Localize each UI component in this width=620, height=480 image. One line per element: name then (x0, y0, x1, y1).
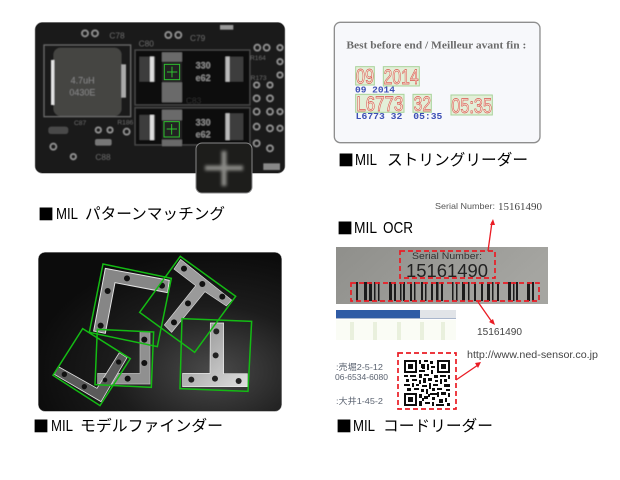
green model match boxes (53, 256, 252, 406)
caption: OCR: ■ (337, 215, 353, 239)
caption: pattern matching: ■ (38, 201, 54, 225)
dashed box: barcode (351, 283, 539, 301)
detected characters: L6773 (356, 92, 403, 116)
QR decoded URL: http://www.ned-sensor.co.jp (467, 350, 598, 361)
icon: upper capacitor (135, 50, 250, 105)
recognised strings: L6773 32 (356, 112, 402, 122)
inset: cross pattern template (196, 143, 252, 193)
icon: upper capacitor: e62 (196, 73, 211, 83)
label serial text: Serial Number: (412, 251, 482, 261)
caption: pattern matching (38, 201, 225, 225)
board silkscreen labels: R173 (251, 75, 267, 82)
QR code (404, 360, 450, 406)
caption: code reader: MIL (353, 418, 375, 435)
caption: string reader: MIL (355, 152, 377, 169)
OCR result label: 15161490 (498, 202, 542, 213)
caption: code reader (336, 413, 493, 437)
card heading text: Best before end / Meilleur avant fin : (346, 40, 526, 52)
recognised strings: 05:35 (413, 112, 442, 122)
dashed box: QR (398, 353, 456, 409)
dashed box: serial (400, 251, 495, 278)
caption: string reader: ストリングリーダー (387, 151, 528, 169)
arrow: QR to url (456, 362, 481, 380)
T bracket lower right (183, 323, 247, 387)
OCR result label (435, 201, 542, 213)
icon: upper capacitor: 330 (196, 60, 211, 70)
panel: MIL pattern matching PCB image (35, 22, 285, 173)
detected characters: 2014 (384, 65, 419, 89)
caption: model finder: モデルファインダー (80, 416, 223, 435)
L bracket upper left (94, 268, 169, 333)
document fragment: blue bar and table (336, 310, 456, 340)
icon: inductor component (44, 45, 131, 117)
barcode decoded number: 15161490 (477, 327, 522, 338)
detected characters: 09 (356, 65, 374, 89)
panel: MIL model finder image (38, 252, 282, 411)
L bracket centre (98, 332, 150, 384)
caption: code reader: コードリーダー (383, 417, 493, 435)
address text fragment: :売堀2-5-12 (336, 362, 383, 372)
caption: code reader: ■ (336, 413, 352, 437)
caption: OCR: OCR (383, 220, 413, 237)
icon: lower capacitor: 330 (196, 118, 211, 128)
panel: OCR barcode label (336, 247, 548, 304)
board silkscreen labels: C78 (109, 30, 125, 40)
caption: OCR (337, 215, 413, 239)
caption: string reader (338, 147, 528, 171)
arrow: serial to text (488, 219, 495, 251)
arrow: barcode to number (478, 302, 495, 325)
green character boxes (356, 67, 492, 115)
pattern match marker lower (164, 122, 179, 137)
address text fragment: :大井1-45-2 (336, 396, 383, 406)
board silkscreen labels: C83 (186, 95, 202, 105)
barcode (356, 282, 534, 301)
board silkscreen labels: C88 (95, 152, 111, 162)
board silkscreen labels: R164 (250, 55, 266, 62)
icon: lower capacitor (135, 108, 250, 146)
caption: model finder: MIL (51, 418, 73, 435)
board silkscreen labels: C87 (74, 120, 87, 127)
board silkscreen labels: C79 (190, 33, 206, 43)
caption: model finder: ■ (33, 413, 49, 437)
board silkscreen labels: R186 (117, 119, 134, 126)
pattern match marker upper (164, 64, 180, 80)
detected characters: 32 (414, 92, 431, 116)
label serial number: 15161490 (406, 261, 488, 281)
board solder pads (50, 30, 283, 159)
L bracket lower left (54, 353, 127, 402)
recognised strings (355, 86, 442, 122)
caption: OCR: MIL (354, 220, 377, 237)
icon: inductor component: 0430E (69, 88, 95, 98)
caption: pattern matching: パターンマッチング (85, 205, 225, 223)
T bracket upper right (164, 259, 232, 332)
caption: string reader: ■ (338, 147, 354, 171)
panel: MIL string reader card (334, 22, 540, 143)
OCR result label: Serial Number: (435, 201, 495, 211)
board silkscreen labels (74, 30, 267, 162)
icon: lower capacitor: e62 (196, 130, 211, 140)
icon: inductor component: 4.7uH (71, 75, 95, 85)
address text fragment: 06-6534-6080 (335, 372, 388, 382)
caption: model finder (33, 413, 223, 437)
address text fragment (335, 362, 388, 406)
board silkscreen labels: C80 (139, 39, 154, 49)
recognised strings: 09 2014 (355, 86, 396, 96)
detected characters (356, 65, 492, 118)
detected characters: 05:35 (451, 94, 492, 118)
caption: pattern matching: MIL (56, 206, 78, 223)
